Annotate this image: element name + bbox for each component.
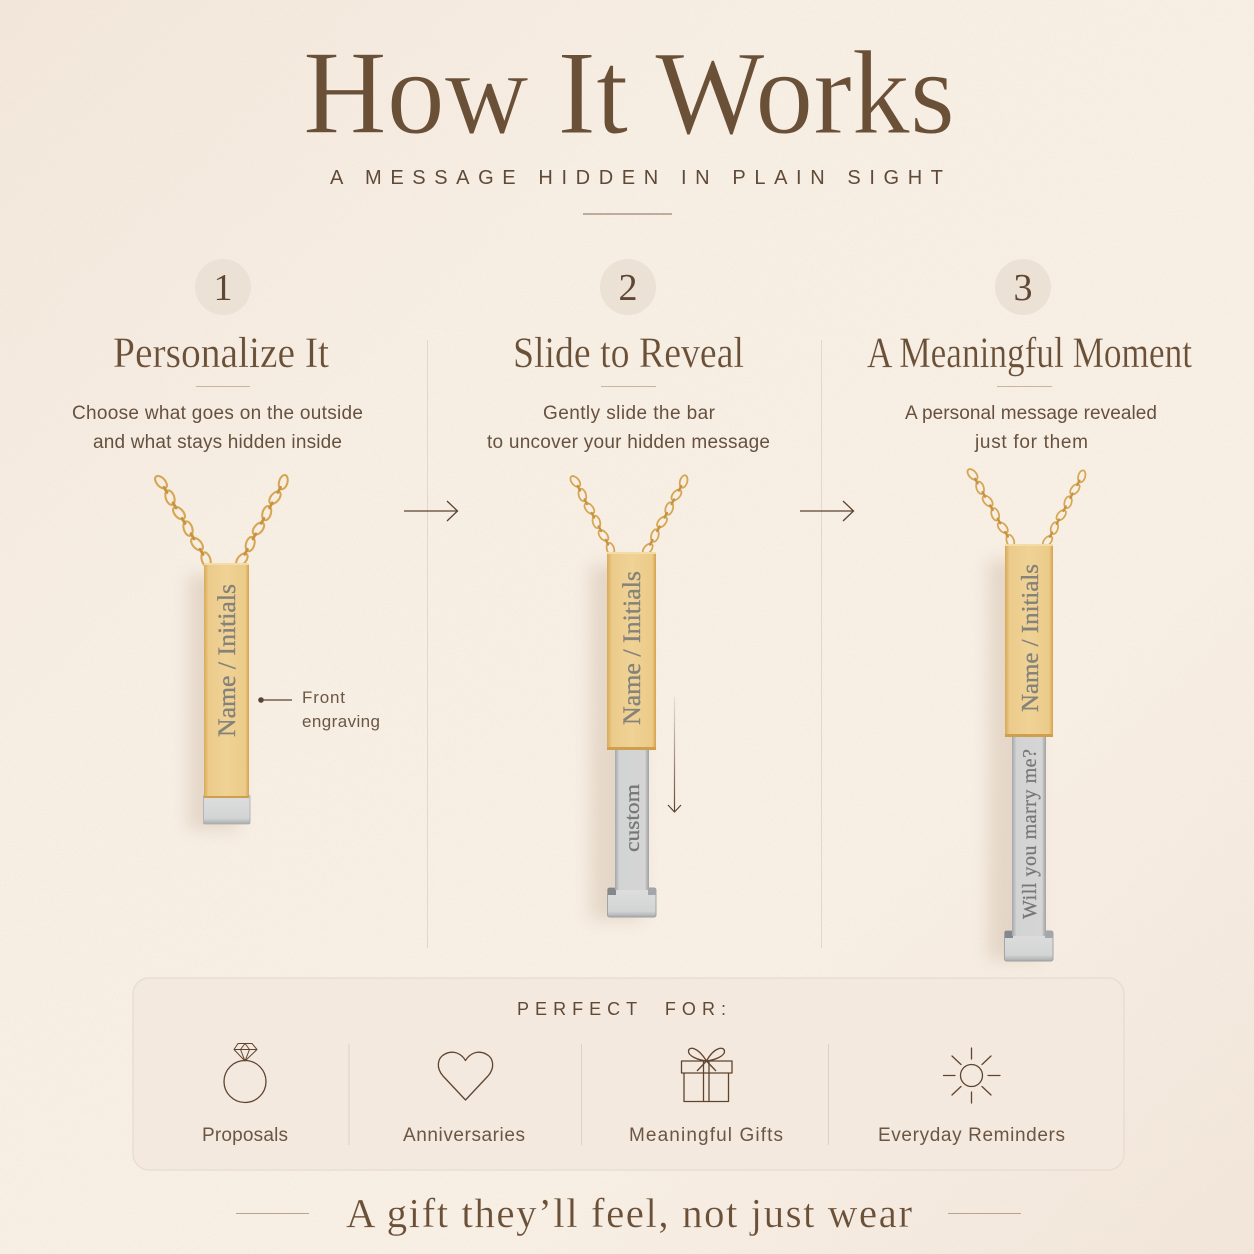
step 2 description: Gently slide the bar: [543, 403, 716, 424]
item: everyday reminders: [878, 1048, 1065, 1146]
step 2: [487, 259, 770, 453]
step 2 number badge: [600, 259, 656, 315]
panel: perfect for: [133, 978, 1124, 1170]
title: How It Works: [303, 26, 955, 159]
tagline: A gift they’ll feel, not just wear: [346, 1190, 912, 1236]
step 1 number badge: [195, 259, 251, 315]
step 2 description: to uncover your hidden message: [487, 432, 770, 453]
step 1 number badge: 1: [214, 267, 232, 309]
hidden message: Will you marry me?: [1019, 749, 1041, 919]
front engraving text: Name / Initials: [214, 584, 241, 737]
necklace 3 chain: [965, 466, 1089, 549]
item: everyday reminders: Everyday Reminders: [878, 1125, 1065, 1146]
step 1: [72, 259, 363, 453]
item: anniversaries: [403, 1052, 525, 1146]
arrow: step 2 to step 3: [800, 501, 854, 521]
icon: heart: [438, 1052, 493, 1100]
item: meaningful gifts: [629, 1048, 783, 1146]
step 2 description: [487, 403, 770, 453]
item: proposals: [202, 1044, 288, 1146]
front engraving on bar 2: Name / Initials: [619, 571, 646, 725]
necklace 2 chain: [568, 473, 691, 558]
icon: diamond ring: [224, 1044, 266, 1102]
step 1 description: and what stays hidden inside: [93, 432, 342, 453]
arrow: step 1 to step 2: [404, 501, 458, 521]
item: meaningful gifts: Meaningful Gifts: [629, 1125, 783, 1146]
step 3 description: [905, 403, 1157, 453]
subtitle: A MESSAGE HIDDEN IN PLAIN SIGHT: [330, 167, 943, 189]
hidden engraving custom: custom: [620, 784, 644, 852]
necklace 3: [965, 466, 1089, 961]
step 3 number badge: [995, 259, 1051, 315]
step 1 description: Choose what goes on the outside: [72, 403, 363, 424]
icon: gift box: [682, 1048, 732, 1102]
panel heading: PERFECT FOR:: [517, 999, 726, 1019]
necklace 1: [152, 472, 292, 830]
necklace 2: [568, 473, 691, 920]
arrow: slide down: [668, 697, 681, 812]
callout: front engraving: engraving: [302, 712, 380, 731]
step 3 number badge: 3: [1014, 267, 1032, 309]
icon: sun: [944, 1048, 1000, 1103]
item: proposals: Proposals: [202, 1125, 288, 1146]
step 1 description: [72, 403, 363, 453]
step 3 heading: A Meaningful Moment: [867, 330, 1192, 377]
step 2 number badge: 2: [618, 267, 638, 309]
step 3: [867, 259, 1192, 453]
callout: front engraving: [258, 688, 380, 731]
step 3 description: just for them: [974, 432, 1088, 453]
necklace 1 chain: [152, 472, 292, 570]
callout: front engraving: Front: [302, 688, 345, 707]
step 2 heading: Slide to Reveal: [513, 330, 744, 377]
step 3 description: A personal message revealed: [905, 403, 1157, 424]
item: anniversaries: Anniversaries: [403, 1125, 525, 1146]
front engraving on bar 3: Name / Initials: [1018, 564, 1044, 712]
step 1 heading: Personalize It: [113, 330, 329, 377]
